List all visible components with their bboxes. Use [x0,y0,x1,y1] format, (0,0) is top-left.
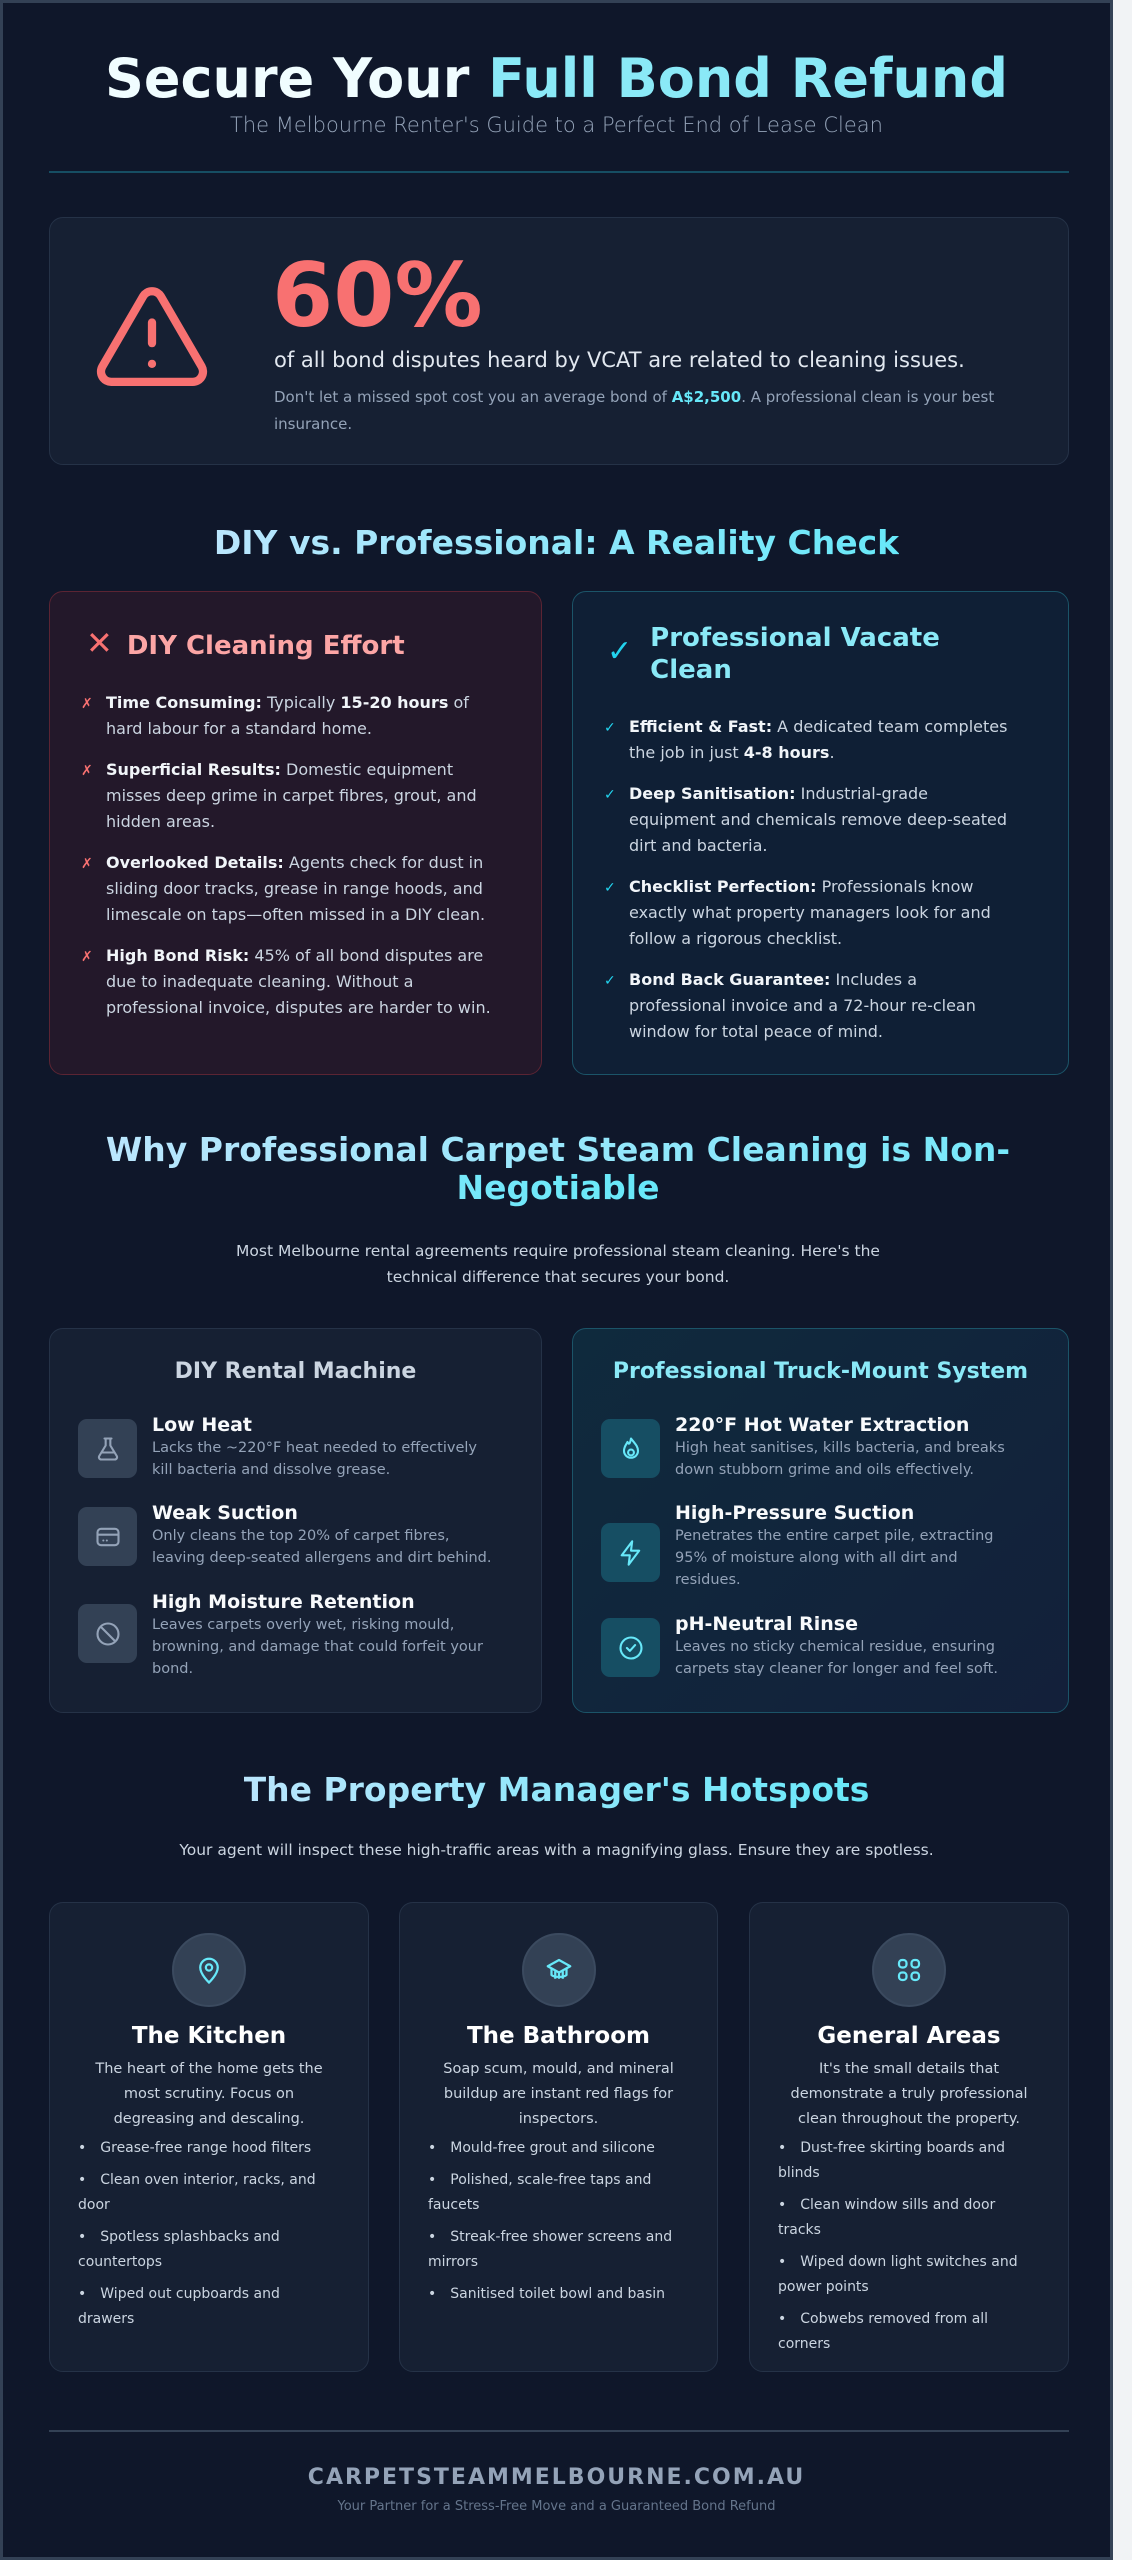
panel: DIY: ✗ [81,949,93,965]
heading: reality check: DIY vs. Professional: A Reality Check [214,523,899,562]
panel: DIY [49,591,542,1075]
panel: general: General Areas [817,2023,1001,2049]
item: rinse [601,1613,998,1677]
title: Secure Your Full Bond Refund [105,47,1008,110]
icon: grid [872,1933,946,2007]
panel: DIY machine [49,1328,542,1713]
panel: bathroom: Streak-free shower screens and mirrors [428,2229,672,2270]
panel: bathroom [399,1902,718,2372]
list: DIY: Overlooked Details: Agents check for dust in sliding door tracks, grease in range hoods, and limescale on taps—often missed in a DIY clean. [106,853,485,924]
panel: kitchen: The Kitchen [132,2023,286,2049]
icon: warning [96,287,208,386]
list: professional: Checklist Perfection: Professionals know exactly what property managers look for and follow a rigorous checklist. [629,877,991,948]
list: professional: Bond Back Guarantee: Includes a professional invoice and a 72-hour re-clean window for total peace of mind. [629,970,976,1041]
panel: truck mount [572,1328,1069,1713]
panel: kitchen: Clean oven interior, racks, and door [78,2172,316,2213]
panel: DIY: ✗ [81,696,93,712]
subtitle: The Melbourne Renter's Guide to a Perfect End of Lease Clean [230,113,883,137]
item: weak suction [78,1502,491,1566]
heading: carpet: Why Professional Carpet Steam Cleaning is Non-Negotiable [106,1130,1010,1207]
item: weak suction: Only cleans the top 20% of carpet fibres, leaving deep-seated allergens and dirt behind. [152,1528,491,1566]
panel: bathroom: The Bathroom [467,2023,650,2049]
panel: kitchen [49,1902,369,2372]
panel: bathroom: Polished, scale-free taps and faucets [428,2172,651,2213]
list: DIY: Superficial Results: Domestic equipment misses deep grime in carpet fibres, grout, and hidden areas. [106,760,477,831]
panel: bathroom: Mould-free grout and silicone [450,2140,655,2156]
item: low heat [78,1414,477,1478]
panel: professional: ✓ [604,787,616,803]
panel: professional: ✓ [604,720,616,736]
list: DIY: Time Consuming: Typically 15-20 hours of hard labour for a standard home. [106,693,469,738]
footer brand: CARPETSTEAMMELBOURNE.COM.AU [308,2465,805,2490]
icon: bath [522,1933,596,2007]
item: suction: Penetrates the entire carpet pile, extracting 95% of moisture along with all dirt and residues. [675,1528,993,1588]
list: DIY [81,693,491,1017]
item: moisture: Leaves carpets overly wet, risking mould, browning, and damage that could forfeit your bond. [152,1617,483,1677]
list: DIY: High Bond Risk: 45% of all bond disputes are due to inadequate cleaning. Without a professional invoice, disputes are harder to win. [106,946,491,1017]
panel: general [749,1902,1069,2372]
heading: professional: ✓ [607,634,632,669]
panel: professional: ✓ [604,880,616,896]
list: professional: Deep Sanitisation: Industrial-grade equipment and chemicals remove deep-seated dirt and bacteria. [629,784,1007,855]
panel: bathroom: Soap scum, mould, and mineral buildup are instant red flags for inspectors. [443,2061,674,2127]
panel: general: It's the small details that demonstrate a truly professional clean throughout the property. [790,2061,1028,2127]
item: suction: High-Pressure Suction [675,1502,914,1524]
panel: DIY: ✗ [81,856,93,872]
panel: stat [49,217,1069,465]
heading: Professional Truck-Mount System [613,1359,1028,1384]
icon: pin [172,1933,246,2007]
item: hot water: High heat sanitises, kills bacteria, and breaks down stubborn grime and oils effectively. [675,1440,1005,1478]
item: hot water: 220°F Hot Water Extraction [675,1414,969,1436]
item: low heat: Low Heat [152,1414,252,1436]
list: professional [604,717,1007,1041]
heading: professional: Clean [650,655,732,685]
panel: professional [572,591,1069,1075]
panel: kitchen: Wiped out cupboards and drawers [78,2286,280,2327]
item: suction [601,1502,993,1588]
item: weak suction: Weak Suction [152,1502,298,1524]
item: hot water [601,1414,1005,1478]
footer tagline: Your Partner for a Stress-Free Move and a Guaranteed Bond Refund [338,2499,775,2514]
big number: 60% [272,244,483,347]
heading: hotspots: The Property Manager's Hotspots [244,1770,869,1809]
item: low heat: Lacks the ~220°F heat needed to effectively kill bacteria and dissolve grease. [152,1440,477,1478]
panel: DIY: ✗ [81,763,93,779]
stat text: of all bond disputes heard by VCAT are related to cleaning issues. [274,348,965,372]
intro: hotspots: Your agent will inspect these high-traffic areas with a magnifying glass. Ensure they are spotless. [179,1841,934,1859]
item: moisture: High Moisture Retention [152,1591,415,1613]
panel: bathroom: Sanitised toilet bowl and basin [450,2286,665,2302]
item: rinse: pH-Neutral Rinse [675,1613,858,1635]
panel: kitchen: The heart of the home gets the most scrutiny. Focus on degreasing and descaling. [95,2061,323,2127]
heading: DIY Rental Machine [175,1359,416,1384]
panel: kitchen: Spotless splashbacks and countertops [78,2229,280,2270]
panel: general: Clean window sills and door tracks [778,2197,995,2238]
stat note: Don't let a missed spot cost you an average bond of A$2,500. A professional clean is your best insurance. [274,388,994,433]
item: moisture [78,1591,483,1677]
panel: general: Dust-free skirting boards and blinds [778,2140,1005,2181]
heading: DIY: ✕ DIY Cleaning Effort [86,624,405,662]
list: professional: Efficient & Fast: A dedicated team completes the job in just 4-8 hours. [629,717,1007,762]
item: rinse: Leaves no sticky chemical residue, ensuring carpets stay cleaner for longer and feel soft. [675,1639,998,1677]
heading: professional: Professional Vacate [650,623,940,653]
panel: general: Wiped down light switches and power points [778,2254,1018,2295]
panel: professional: ✓ [604,973,616,989]
panel: general: Cobwebs removed from all corners [778,2311,988,2352]
panel: kitchen: Grease-free range hood filters [100,2140,311,2156]
intro: carpet: Most Melbourne rental agreements require professional steam cleaning. Here's the technical difference that secures your bond. [236,1242,880,1286]
heading: professional [607,623,940,685]
